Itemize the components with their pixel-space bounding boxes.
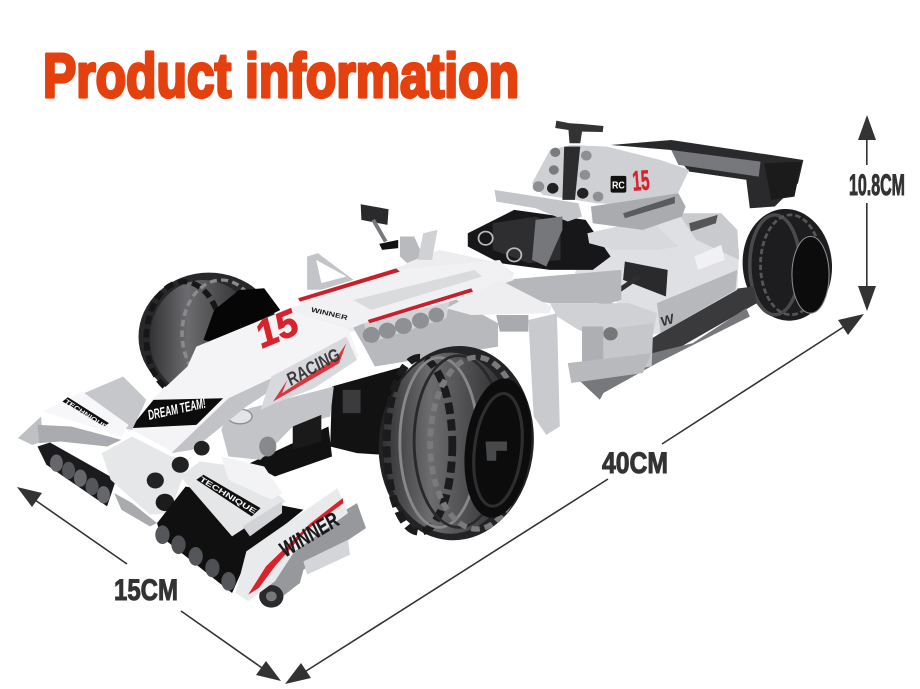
nose tip — [102, 436, 210, 526]
small winner badge: WINNER — [310, 307, 348, 322]
engine cover top — [532, 145, 689, 230]
number 15 on engine: 15 — [631, 165, 651, 197]
race car rear section — [300, 121, 836, 400]
left engine linkages — [495, 190, 582, 222]
nose number 15: 15 — [248, 302, 306, 356]
dream team sticker: DREAM TEAM! — [146, 396, 208, 424]
racing panel — [261, 337, 357, 410]
engine lower cover — [587, 223, 678, 250]
side fin — [446, 280, 560, 435]
engine cover side — [575, 213, 739, 336]
width label: 15CM — [114, 574, 178, 607]
rear wheel — [739, 206, 836, 324]
far front wheel — [139, 273, 280, 401]
length label: 40CM — [602, 447, 668, 480]
dark suspension centre — [330, 367, 403, 455]
title: Product information — [43, 42, 519, 111]
grey side arm — [221, 387, 334, 460]
racing decal text: RACING — [282, 344, 344, 389]
dimension arrow: width 15CM — [17, 487, 281, 681]
left front wing: TECHNIQUE — [63, 399, 109, 431]
rear deck panel — [300, 250, 514, 340]
side beam with holes — [352, 298, 498, 367]
dream team sticker — [130, 396, 223, 428]
side pod bars — [503, 270, 621, 303]
mirror left — [361, 204, 398, 250]
RC badge: RC — [612, 181, 625, 191]
rear wing — [611, 140, 803, 208]
RC badge — [611, 176, 626, 193]
right front wing — [155, 456, 366, 608]
air intake handle — [555, 121, 603, 143]
dimension arrow: height 10.8CM — [849, 115, 905, 311]
race car front section — [18, 260, 560, 608]
right front wing: WINNER — [274, 508, 344, 561]
left front wing — [18, 377, 146, 506]
near front wheel — [372, 341, 541, 545]
top deck panel with red stripes — [286, 260, 514, 328]
winged number plate — [180, 461, 286, 536]
dimension arrow: length 40CM — [285, 314, 864, 684]
mid deck pieces — [400, 237, 423, 263]
right front wing: TECHNIQUE — [198, 475, 258, 516]
nose cone — [130, 302, 359, 453]
engine black core — [468, 210, 611, 270]
mirror right — [599, 262, 668, 307]
side decal: W — [659, 311, 677, 329]
winner endplate — [236, 488, 348, 601]
lower side bar — [600, 286, 757, 393]
black underside — [250, 426, 332, 476]
